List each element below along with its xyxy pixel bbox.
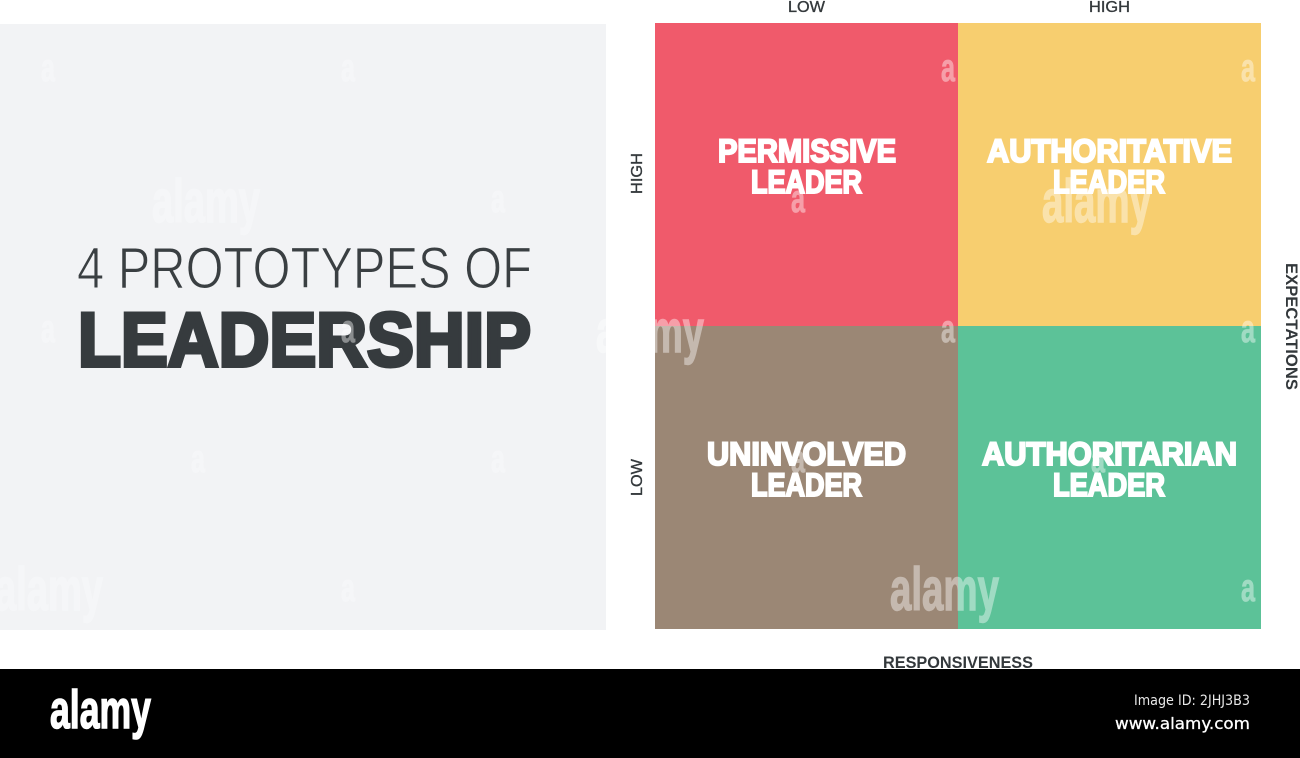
watermarks: alamy [596, 298, 704, 365]
heading: 4 prototypes of: 4 PROTOTYPES OF [77, 236, 532, 301]
watermarks: a [491, 438, 505, 481]
footer url: www.alamy.com [1115, 714, 1250, 733]
footer image id: Image ID: 2JHJ3B3 [1134, 693, 1250, 709]
watermarks: a [1241, 47, 1255, 90]
panel: permissive leader [655, 23, 958, 326]
footer logo: alamy [50, 680, 151, 740]
panel: authoritative leader: LEADER [1053, 164, 1165, 200]
watermarks: a [341, 567, 355, 610]
panel: permissive leader: PERMISSIVE [718, 133, 896, 169]
panel: uninvolved leader: UNINVOLVED [707, 436, 906, 472]
watermarks: a [491, 178, 505, 221]
watermarks: a [1091, 438, 1105, 481]
watermarks: a [791, 438, 805, 481]
panel: permissive leader: LEADER [751, 164, 862, 200]
panel: authoritarian leader: AUTHORITARIAN [982, 436, 1237, 472]
watermarks [0, 47, 1255, 623]
watermarks: a [1241, 308, 1255, 351]
panel: title background [0, 24, 606, 630]
watermarks: a [41, 47, 55, 90]
panel: authoritarian leader [958, 326, 1261, 629]
watermarks: a [341, 47, 355, 90]
axis label: expectations low: LOW [629, 458, 646, 496]
panel: authoritarian leader: LEADER [1053, 467, 1165, 503]
panel: authoritative leader: AUTHORITATIVE [987, 133, 1232, 169]
axis title: responsiveness: RESPONSIVENESS [883, 653, 1033, 672]
panel: uninvolved leader: LEADER [751, 467, 862, 503]
watermarks: a [941, 47, 955, 90]
watermarks: a [941, 308, 955, 351]
panel: uninvolved leader [655, 326, 958, 629]
footer bar [0, 669, 1300, 758]
watermarks: alamy [152, 168, 260, 235]
axis labels [629, 0, 1300, 672]
watermarks: a [191, 438, 205, 481]
axis label: expectations high: HIGH [629, 153, 646, 194]
heading: leadership: LEADERSHIP [78, 298, 531, 383]
watermarks: a [1241, 567, 1255, 610]
watermarks: alamy [890, 556, 999, 623]
panel: authoritative leader [958, 23, 1261, 326]
watermarks: alamy [0, 556, 103, 623]
watermarks: a [791, 178, 805, 221]
matrix: four leadership quadrants [655, 23, 1261, 629]
watermarks: a [341, 308, 355, 351]
watermarks: alamy [1042, 168, 1151, 235]
title [77, 236, 532, 383]
watermarks: a [41, 308, 55, 351]
